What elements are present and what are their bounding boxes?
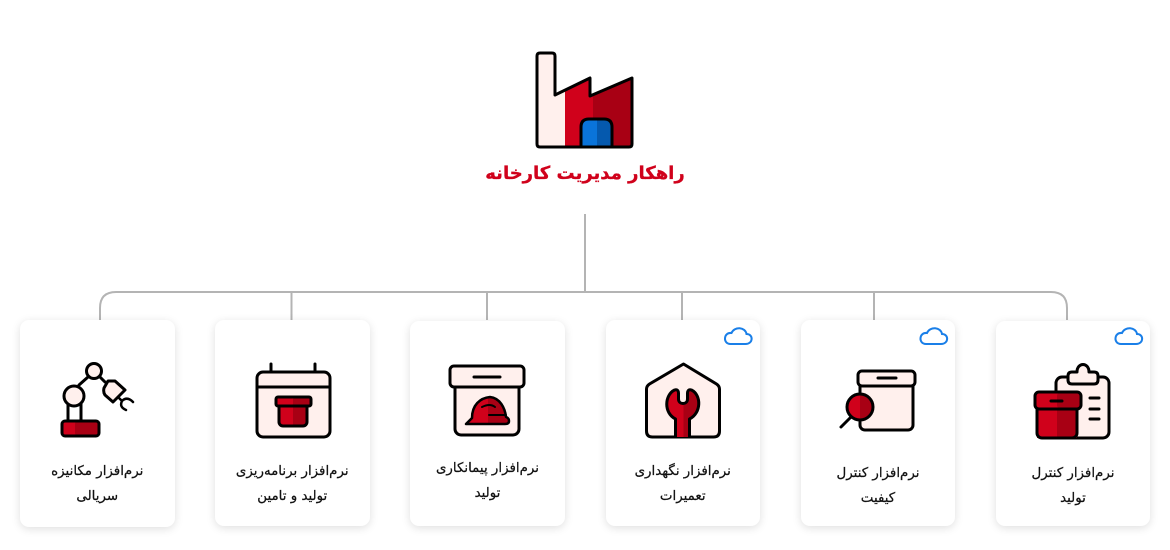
label: نرم‌افزار پیمانکاری [436,461,539,476]
label [51,464,143,504]
panel: production planning and supply software [215,320,370,526]
icon: house with wrench [645,362,721,438]
label: تعمیرات [660,489,706,504]
label [837,466,919,506]
icon: cloud [724,327,753,345]
panel: production control software [996,321,1150,526]
label: نرم‌افزار کنترل [1032,466,1114,481]
panel: production contracting software [410,321,565,526]
label: نرم‌افزار مکانیزه [51,464,143,479]
label [436,461,539,501]
panel: quality control software [801,320,955,526]
icon: clipboard and box [1034,363,1110,440]
label [1032,466,1114,506]
label: تولید [475,486,500,501]
panel: serial mechanization software [20,320,174,527]
icon: cloud [920,327,948,345]
label: نرم‌افزار کنترل [837,466,919,481]
label [236,464,349,504]
label: تولید [1060,491,1086,506]
icon: robot arm [60,362,134,438]
icon: cloud [1114,327,1144,345]
label: نرم‌افزار برنامه‌ریزی [236,464,349,479]
icon: box with magnifier [839,370,916,432]
label: نرم‌افزار نگهداری [635,464,731,479]
label [635,462,731,504]
label: تولید و تامین [257,489,327,504]
panel: maintenance software [606,320,760,526]
label: کیفیت [861,491,895,506]
title: راهکار مدیریت کارخانه [485,163,685,184]
label: سریالی [76,489,118,504]
icon: factory [536,52,634,148]
icon: calendar with box [256,362,332,438]
icon: box with helmet [448,364,526,436]
